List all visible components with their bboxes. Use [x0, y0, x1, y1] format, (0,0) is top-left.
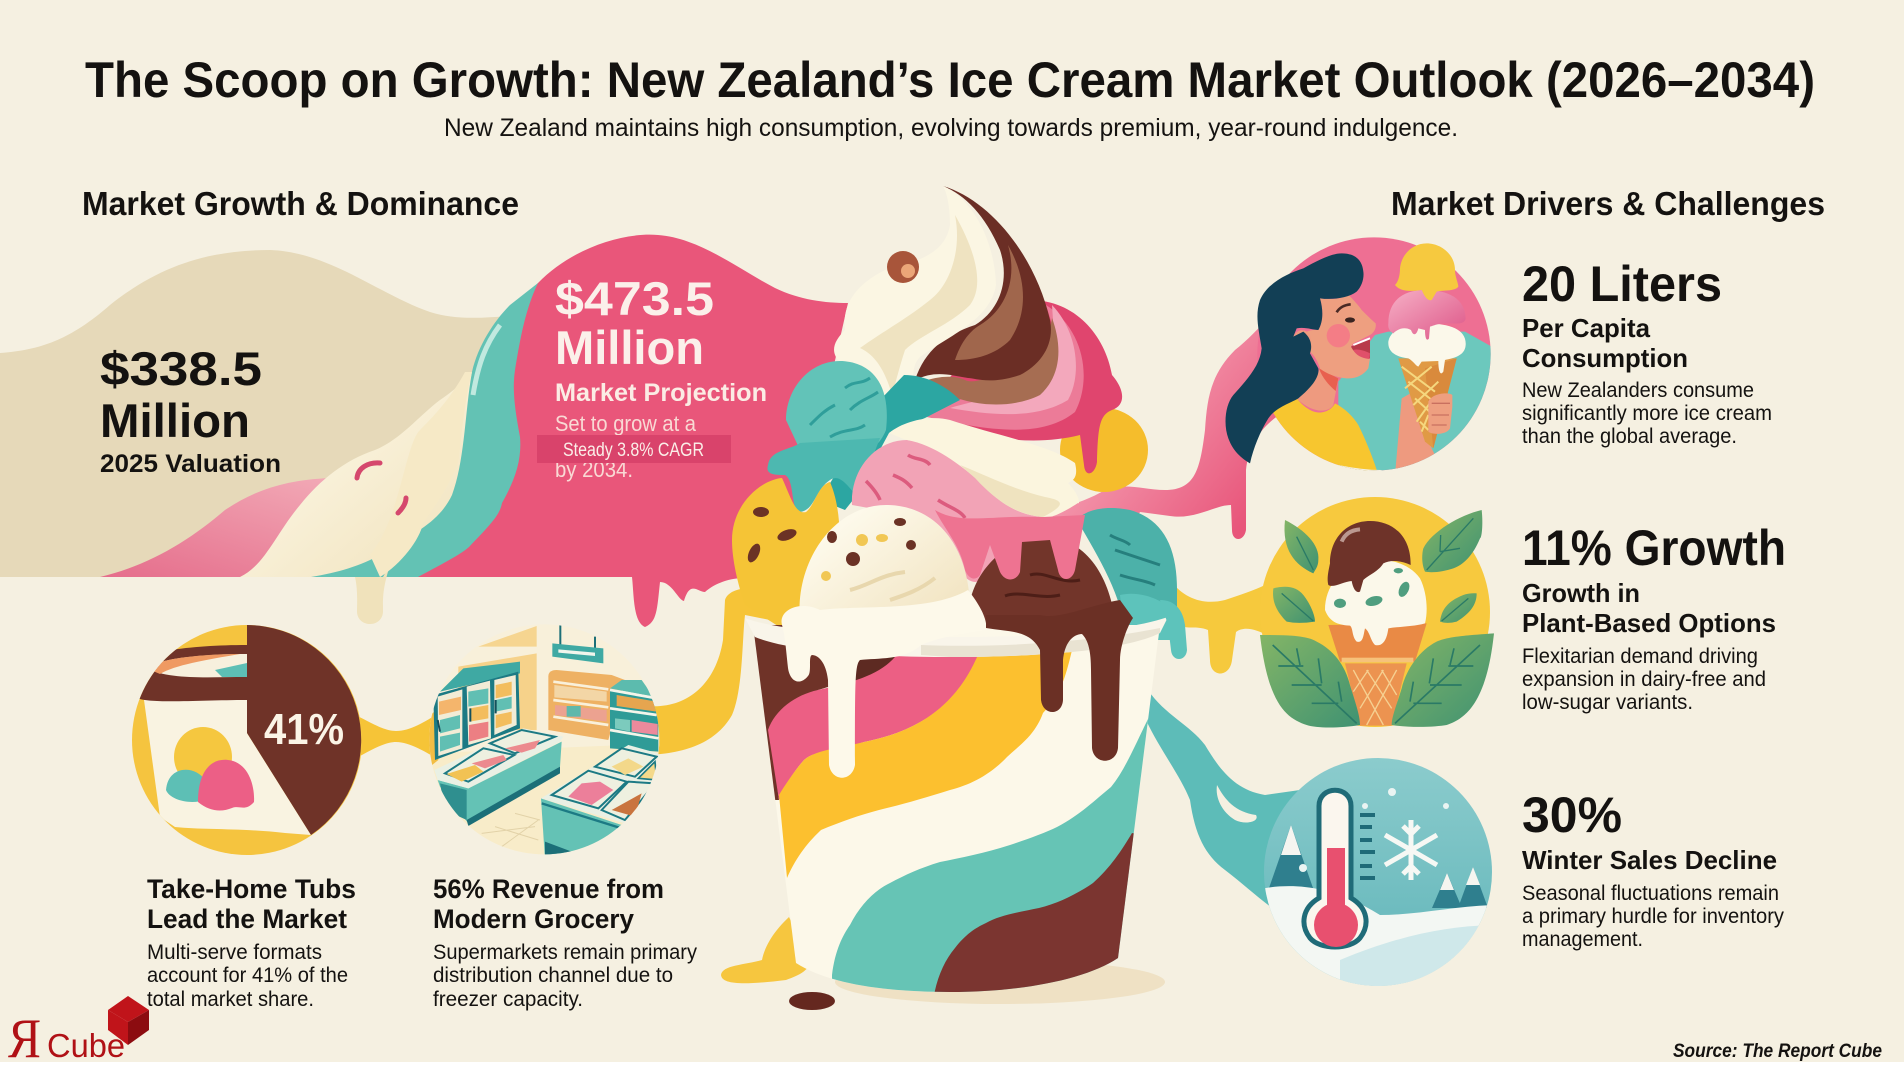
text: 20 liters: New Zealanders consume — [1522, 379, 1754, 402]
text: 11% growth: low-sugar variants. — [1522, 691, 1693, 714]
text: modern grocery: Supermarkets remain primary — [433, 941, 697, 964]
subtitle: New Zealand maintains high consumption, evolving towards premium, year-round indulgence. — [444, 114, 1458, 142]
text: take-home tubs: total market share. — [147, 988, 314, 1011]
growth wave chart — [0, 235, 848, 627]
text: take-home tubs: Multi-serve formats — [147, 941, 322, 964]
stat: market projection: $473.5 — [555, 272, 714, 325]
text: 11% growth: Growth in — [1522, 578, 1640, 608]
text: modern grocery: Modern Grocery — [433, 904, 634, 934]
text: 30% winter: Winter Sales Decline — [1522, 845, 1777, 875]
stat: market projection: by 2034. — [555, 457, 633, 482]
logo: RCube: Cube — [47, 1027, 125, 1064]
circle: per capita consumption — [1226, 235, 1495, 478]
teal drip on rim — [1160, 600, 1187, 659]
stat: market projection: Million — [555, 321, 704, 374]
chocolate melt drips — [986, 600, 1133, 761]
yellow puddle — [721, 917, 810, 983]
ice cream scoops — [732, 186, 1180, 660]
stat: 2025 valuation: $338.5 — [100, 342, 262, 395]
text: take-home tubs: Lead the Market — [147, 904, 347, 934]
teal ribbon to winter circle — [1146, 690, 1300, 920]
label: 41%: 41% — [264, 705, 344, 754]
text: 11% growth: 11% Growth — [1522, 520, 1786, 576]
text: take-home tubs: Take-Home Tubs — [147, 874, 356, 904]
text: 30% winter: management. — [1522, 928, 1643, 951]
text: 11% growth: Flexitarian demand driving — [1522, 645, 1758, 668]
paper cup — [745, 617, 1175, 1000]
text: 20 liters: significantly more ice cream — [1522, 402, 1772, 425]
text: 11% growth: expansion in dairy-free and — [1522, 668, 1766, 691]
stat: 2025 valuation: Million — [100, 394, 250, 447]
heading: market drivers: Market Drivers & Challenges — [1391, 185, 1825, 222]
text: 20 liters: Per Capita — [1522, 313, 1651, 343]
text: 11% growth: Plant-Based Options — [1522, 608, 1776, 638]
stat: 2025 valuation — [100, 342, 281, 478]
text: 30% winter: a primary hurdle for inventory — [1522, 905, 1784, 928]
stat: market projection: Market Projection — [555, 379, 767, 407]
circle: plant-based growth — [1260, 497, 1494, 727]
logo: RCube — [8, 996, 149, 1070]
text: take-home tubs: account for 41% of the — [147, 964, 348, 987]
heading: market growth: Market Growth & Dominance — [82, 185, 519, 222]
text: modern grocery: freezer capacity. — [433, 988, 583, 1011]
cup shadow — [835, 960, 1165, 1004]
yellow connector ribbon — [350, 588, 770, 762]
text: 30% winter — [1522, 787, 1784, 951]
circle: winter decline — [1217, 755, 1500, 990]
text: 11% growth — [1522, 520, 1786, 714]
text: 30% winter: 30% — [1522, 787, 1622, 843]
text: take-home tubs — [147, 874, 356, 1011]
text: 20 liters — [1522, 256, 1772, 448]
title: The Scoop on Growth: New Zealand’s Ice Cream Market Outlook (2026–2034) — [85, 52, 1815, 108]
text: modern grocery: distribution channel due to — [433, 964, 673, 987]
text: 20 liters: than the global average. — [1522, 425, 1737, 448]
text: 20 liters: Consumption — [1522, 343, 1688, 373]
logo: RCube: Я — [8, 1008, 41, 1070]
text: modern grocery: 56% Revenue from — [433, 874, 664, 904]
text: 30% winter: Seasonal fluctuations remain — [1522, 882, 1779, 905]
stat: market projection — [537, 272, 767, 482]
text: 20 liters: 20 Liters — [1522, 256, 1722, 312]
icon: grocery store freezers — [425, 620, 665, 860]
vanilla melt over rim — [782, 590, 986, 778]
stat: 2025 valuation: 2025 Valuation — [100, 450, 281, 478]
icon: take-home tub pie — [132, 625, 362, 855]
yellow ribbon to plant circle — [1170, 580, 1275, 674]
stat: market projection: Set to grow at a — [555, 411, 697, 436]
source note: Source: The Report Cube — [1673, 1041, 1882, 1062]
text: modern grocery — [433, 874, 697, 1011]
chocolate drop — [789, 992, 835, 1010]
stat: market projection: Steady 3.8% CAGR — [563, 440, 704, 461]
pink ribbon to consumption circle — [960, 265, 1310, 582]
